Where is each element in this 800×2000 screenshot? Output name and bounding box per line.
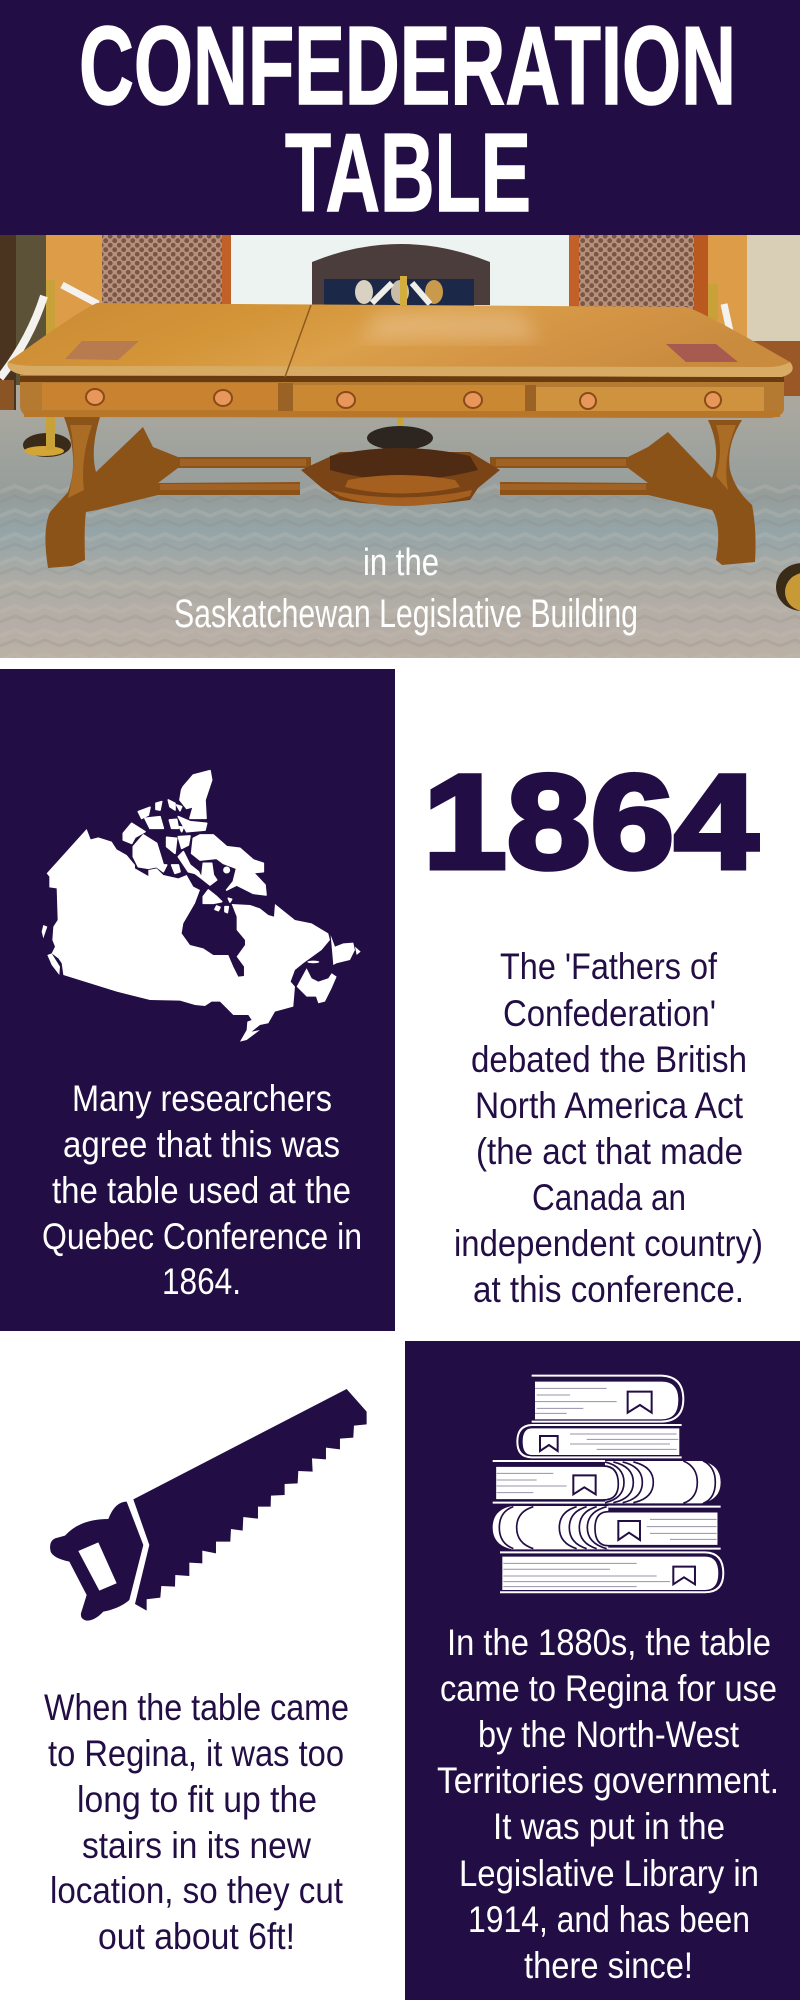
photo: the Confederation table — [0, 235, 800, 658]
panel: saw — [44, 1389, 367, 1957]
icon: hand saw — [50, 1389, 367, 1621]
big year: 1864 — [423, 748, 758, 897]
text: table cut: stairs in its new — [82, 1825, 311, 1866]
text: Fathers of Confederation: (the act that made — [476, 1131, 743, 1172]
text: Regina history: Legislative Library in — [459, 1853, 759, 1894]
text: Fathers of Confederation — [454, 946, 763, 1310]
text: researchers: Quebec Conference in — [42, 1216, 362, 1257]
text: researchers: agree that this was — [63, 1124, 340, 1165]
photo: left brass stanchion — [0, 280, 98, 457]
text: Fathers of Confederation: The 'Fathers of — [500, 946, 718, 987]
photo backdrop: wall and fireplace — [0, 235, 800, 658]
photo: centre and right stanchions — [367, 276, 800, 611]
text: Fathers of Confederation: debated the British — [471, 1039, 747, 1080]
text: researchers — [42, 1078, 362, 1302]
text: table cut: out about 6ft! — [98, 1916, 295, 1957]
text: Regina history: 1914, and has been — [468, 1899, 750, 1940]
title line 2: TABLE — [285, 111, 531, 235]
text: Fathers of Confederation: North America Act — [475, 1085, 744, 1126]
text: Fathers of Confederation: independent country) — [454, 1223, 763, 1264]
text: table cut: location, so they cut — [50, 1870, 344, 1911]
text: researchers: Many researchers — [72, 1078, 332, 1119]
text: Regina history: It was put in the — [493, 1806, 725, 1847]
text: table cut — [44, 1687, 349, 1957]
text: Fathers of Confederation: Canada an — [532, 1177, 686, 1218]
text: Fathers of Confederation: at this conference. — [473, 1269, 744, 1310]
text: table cut: to Regina, it was too — [48, 1733, 344, 1774]
panel: 1864 — [423, 748, 763, 1310]
text: Regina history: by the North-West — [478, 1714, 740, 1755]
text: Regina history: there since! — [524, 1945, 693, 1986]
text: researchers: the table used at the — [52, 1170, 351, 1211]
text: Fathers of Confederation: Confederation' — [503, 993, 716, 1034]
photo: table top — [8, 303, 793, 377]
icon: map of Canada — [42, 771, 361, 1042]
book 1 — [532, 1376, 683, 1422]
photo caption: in the — [363, 542, 439, 584]
drawer handles — [86, 389, 721, 409]
photo: table apron and drawers — [20, 372, 784, 418]
photo caption: Saskatchewan Legislative Building — [174, 592, 638, 636]
photo caption — [174, 542, 638, 636]
book 3 — [493, 1461, 721, 1503]
arctic islands — [123, 771, 266, 913]
text: table cut: When the table came — [44, 1687, 349, 1728]
icon: stack of books — [493, 1376, 723, 1592]
panel: books — [405, 1341, 800, 2000]
text: Regina history — [437, 1622, 779, 1986]
title banner — [0, 0, 800, 235]
photo: carpet — [0, 410, 800, 658]
text: table cut: long to fit up the — [77, 1779, 317, 1820]
photo: table legs and stretcher — [45, 417, 756, 568]
book 2 — [517, 1425, 682, 1457]
text: researchers: 1864. — [162, 1261, 241, 1302]
panel: Quebec Conference — [0, 669, 395, 1331]
book 5 — [500, 1552, 723, 1592]
book 4 — [493, 1506, 721, 1549]
